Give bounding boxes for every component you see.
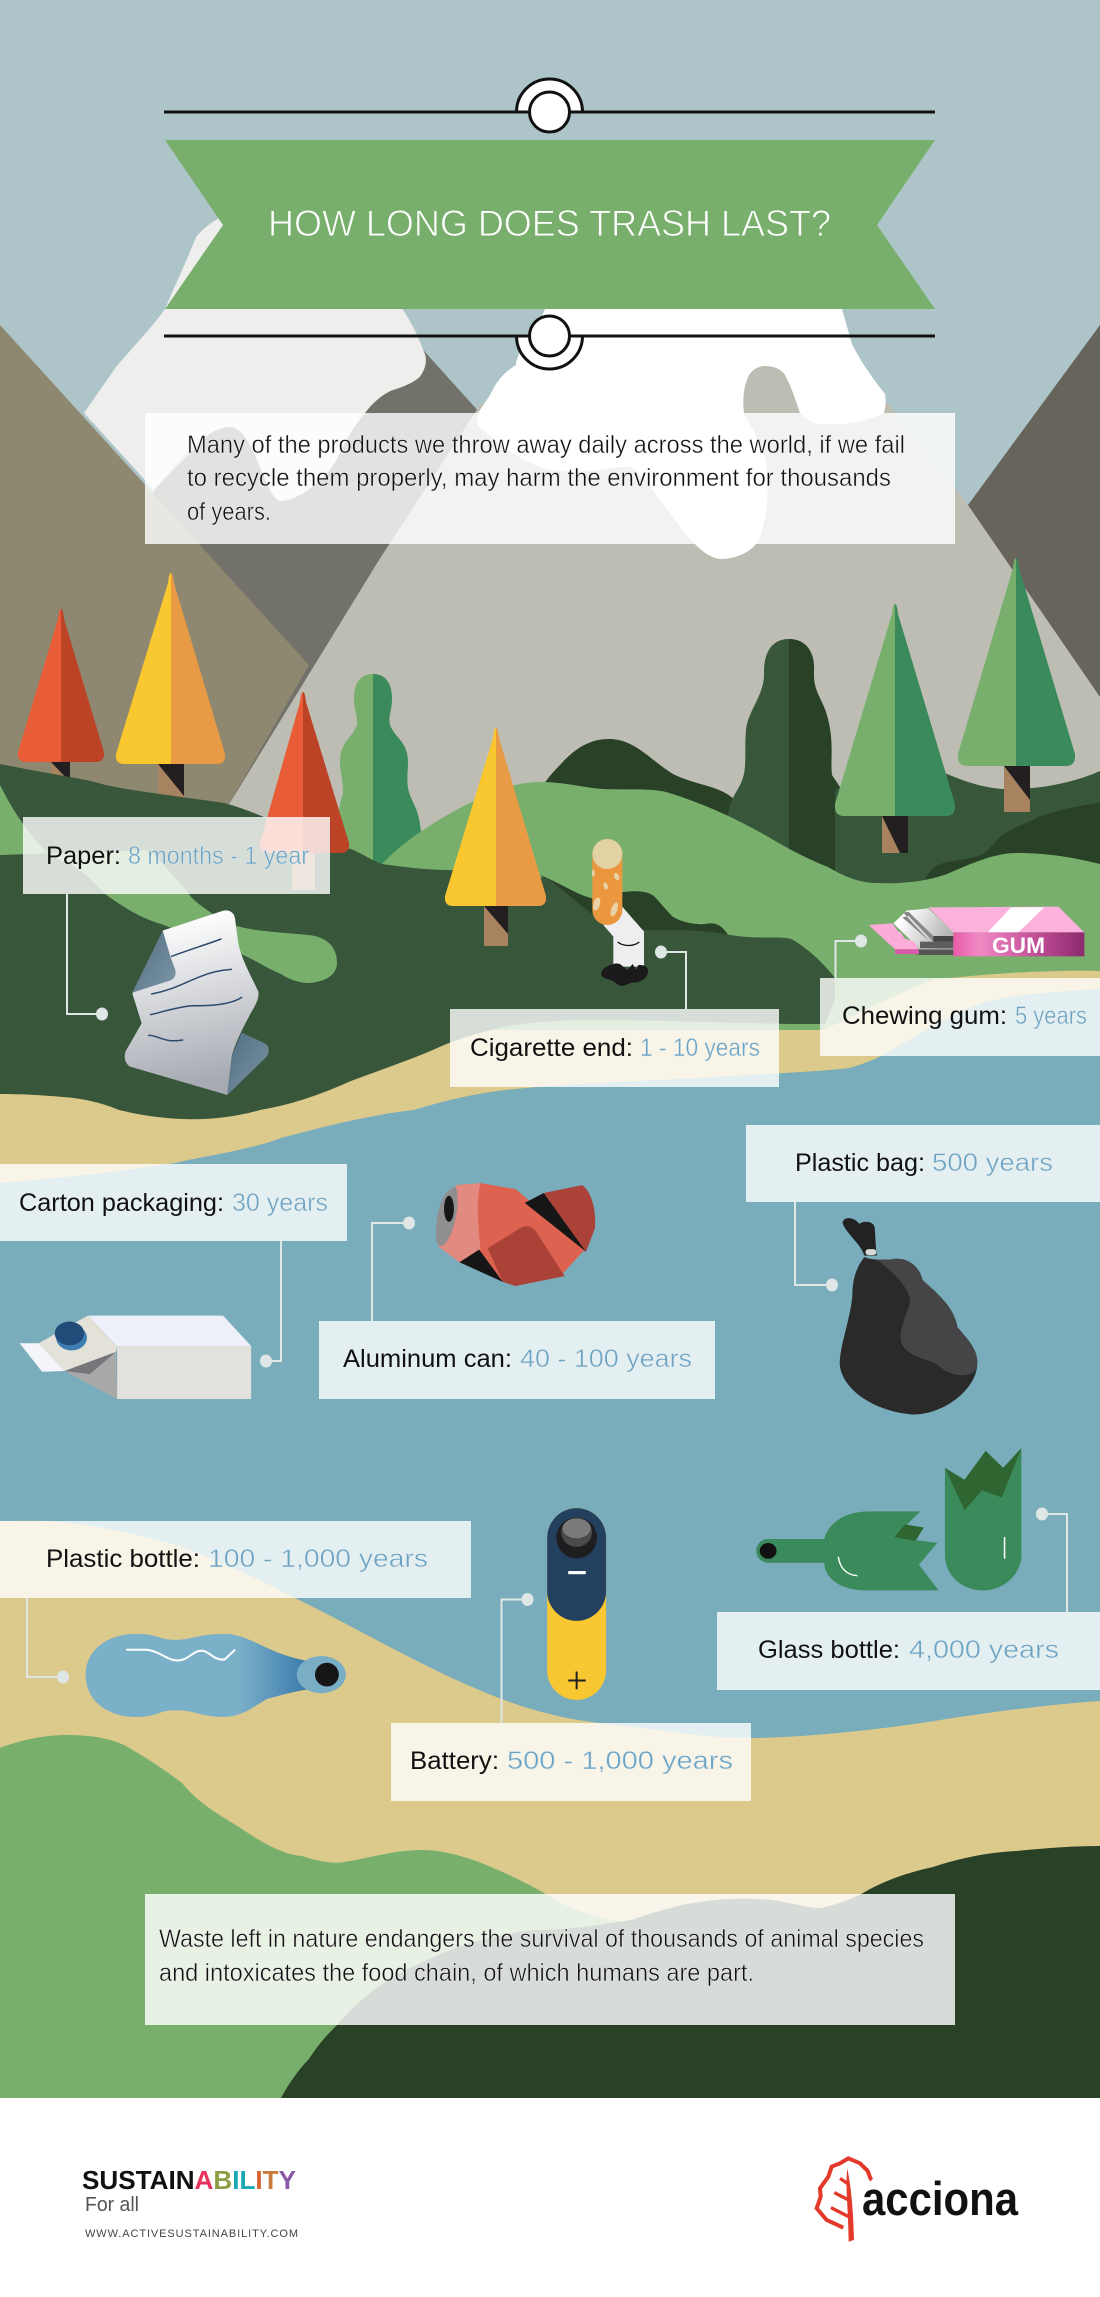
icon: aluminum can xyxy=(436,1183,595,1286)
label: battery: Battery: xyxy=(410,1747,499,1775)
logo: sustainability for all xyxy=(82,2165,298,2240)
icon: carton packaging xyxy=(20,1316,251,1399)
tree: yellow 1 xyxy=(116,573,225,800)
label: cigarette end: Cigarette end: xyxy=(470,1034,633,1062)
tree: red 1 xyxy=(18,609,104,792)
label: paper: Paper: xyxy=(46,842,121,870)
label: battery: 500 - 1,000 years xyxy=(507,1747,733,1775)
icon: plastic bottle xyxy=(86,1634,346,1717)
label: carton packaging: Carton packaging: xyxy=(19,1189,224,1217)
intro text box xyxy=(145,413,955,544)
logo: sustainability for all: SUSTAINABILITY xyxy=(82,2165,296,2195)
bottom green hill xyxy=(0,1735,631,2098)
label: glass bottle: 4,000 years xyxy=(909,1636,1059,1664)
intro text box: to recycle them properly, may harm the environment for thousands xyxy=(187,464,891,492)
label: paper: 8 months - 1 year xyxy=(128,842,309,870)
tree: yellow front xyxy=(445,728,546,946)
sand upper shore xyxy=(0,971,1100,1183)
header ornament bottom xyxy=(164,316,935,369)
label: battery xyxy=(391,1593,751,1801)
mid green hill xyxy=(0,764,835,1119)
tree: red 2 xyxy=(260,692,349,890)
label: aluminum can: 40 - 100 years xyxy=(520,1345,692,1373)
sand lower shore xyxy=(0,1521,1100,2098)
label: aluminum can xyxy=(319,1216,715,1399)
light green tongue xyxy=(0,785,337,983)
label: glass bottle: Glass bottle: xyxy=(758,1636,900,1664)
water xyxy=(0,989,1100,1760)
icon: chewing gum xyxy=(869,907,1084,956)
light green hill xyxy=(382,782,1100,1100)
back hill dark xyxy=(520,739,768,900)
label: chewing gum: Chewing gum: xyxy=(842,1002,1007,1030)
label: cigarette end xyxy=(450,946,779,1087)
label: plastic bag xyxy=(746,1125,1100,1292)
tree: green 2 xyxy=(958,558,1075,812)
logo: acciona: acciona xyxy=(862,2172,1019,2225)
closing text box: and intoxicates the food chain, of which humans are part. xyxy=(159,1959,754,1987)
icon: glass bottle xyxy=(756,1448,1021,1590)
footer xyxy=(0,2098,1100,2297)
closing text box: Waste left in nature endangers the survival of thousands of animal species xyxy=(159,1925,924,1953)
label: plastic bag: 500 years xyxy=(932,1149,1053,1177)
intro text box: of years. xyxy=(187,498,271,526)
logo: sustainability for all: WWW.ACTIVESUSTAINABILITY.COM xyxy=(85,2228,298,2240)
label: carton packaging: 30 years xyxy=(232,1189,328,1217)
logo: acciona xyxy=(817,2158,1019,2242)
label: aluminum can: Aluminum can: xyxy=(343,1345,512,1373)
icon: battery xyxy=(547,1508,606,1700)
back hill right lower xyxy=(926,803,1100,900)
label: carton packaging xyxy=(0,1164,347,1368)
icon: plastic bag xyxy=(840,1218,977,1414)
tree: green 1 xyxy=(835,604,955,853)
tree: green blob xyxy=(337,674,421,870)
logo: sustainability for all: For all xyxy=(85,2194,139,2216)
label: chewing gum: GUM xyxy=(992,933,1045,958)
closing text box xyxy=(145,1894,955,2025)
label: plastic bottle: 100 - 1,000 years xyxy=(208,1545,428,1573)
bottom dark hill xyxy=(281,1846,1100,2098)
label: cigarette end: 1 - 10 years xyxy=(640,1034,760,1062)
title banner: HOW LONG DOES TRASH LAST? xyxy=(268,203,831,244)
icon: paper xyxy=(125,910,269,1095)
label: glass bottle xyxy=(717,1508,1100,1690)
tree: dark blob xyxy=(728,639,852,880)
label: chewing gum xyxy=(820,933,1100,1056)
label: plastic bottle xyxy=(0,1521,471,1684)
label: plastic bottle: Plastic bottle: xyxy=(46,1545,200,1573)
icon: cigarette end xyxy=(592,839,648,986)
intro text box: Many of the products we throw away daily across the world, if we fail xyxy=(187,431,905,459)
title banner xyxy=(165,140,935,309)
mountains and snow xyxy=(0,150,1100,900)
back hill right xyxy=(835,770,1100,900)
label: paper xyxy=(23,817,330,1020)
label: plastic bag: Plastic bag: xyxy=(795,1149,925,1177)
header ornament top xyxy=(164,79,935,132)
label: chewing gum: 5 years xyxy=(1015,1002,1087,1030)
dark ridge patch xyxy=(540,875,730,938)
